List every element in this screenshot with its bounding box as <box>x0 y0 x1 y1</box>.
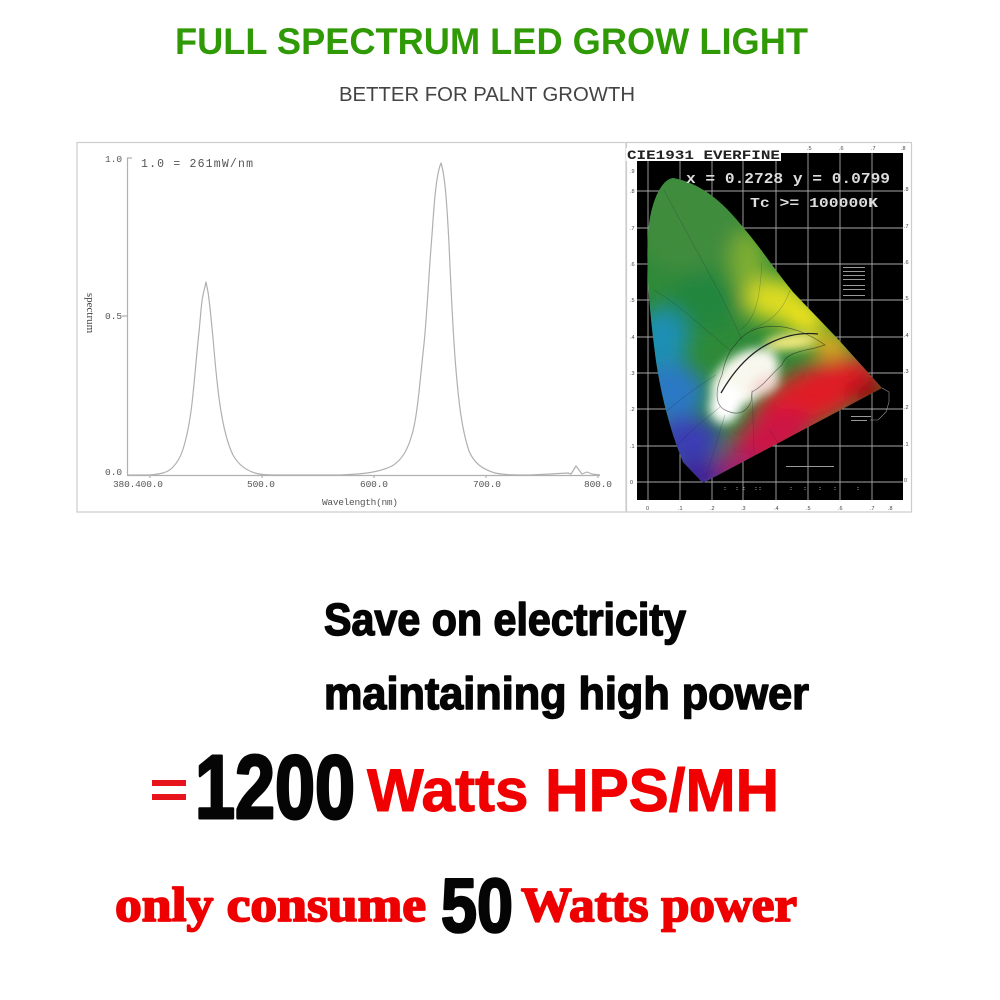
panel: spectrum chart <box>77 142 626 512</box>
axis labels: 0.5 <box>105 311 122 322</box>
equals sign <box>152 780 186 800</box>
axis labels: Wavelength(nm) <box>322 497 398 508</box>
diagram tick labels: .4 <box>630 335 635 341</box>
diagram tick labels: .7 <box>904 224 909 230</box>
axis labels: 800.0 <box>584 479 612 490</box>
diagram tick labels: .5 <box>806 506 811 512</box>
diagram tick labels: .7 <box>870 506 875 512</box>
diagram tick labels: 0 <box>646 506 649 512</box>
diagram tick labels: 0 <box>904 478 907 484</box>
equivalence line: 1200 watts HPS/MH <box>152 738 779 838</box>
number 1200: 1200 <box>195 738 355 838</box>
diagram tick labels: .6 <box>838 506 843 512</box>
diagram tick labels: .3 <box>741 506 746 512</box>
benefit text: save on electricity: Save on electricity <box>324 594 686 645</box>
axis labels: 600.0 <box>360 479 388 490</box>
colour temperature readout: Tc >= 100000K <box>750 197 879 212</box>
diagram tick labels: .1 <box>678 506 683 512</box>
watts HPS/MH label: Watts HPS/MH <box>367 757 779 824</box>
diagram tick labels <box>630 146 909 512</box>
axis labels: 1.0 <box>105 154 122 165</box>
diagram tick labels: .7 <box>630 226 635 232</box>
diagram tick labels: .2 <box>630 407 635 413</box>
axis labels: 380.400.0 <box>113 479 163 490</box>
number 50: 50 <box>441 864 513 949</box>
planckian locus <box>721 333 818 393</box>
grid <box>637 153 903 500</box>
watts power label: Watts power <box>521 877 797 932</box>
diagram tick labels: .5 <box>807 146 812 152</box>
diagram tick labels: .8 <box>901 146 906 152</box>
diagram tick labels: .1 <box>630 444 635 450</box>
title: FULL SPECTRUM LED GROW LIGHT <box>175 21 808 62</box>
diagram tick labels: .5 <box>904 296 909 302</box>
benefit text: maintaining high power: maintaining high power <box>324 668 809 719</box>
y-axis title: spectrum <box>84 293 96 334</box>
consumption line: only consume 50 watts power <box>115 864 797 949</box>
colour horseshoe <box>647 178 882 483</box>
small diagram annotations <box>725 267 889 490</box>
diagram tick labels: .4 <box>904 333 909 339</box>
diagram tick labels: .3 <box>904 369 909 375</box>
panel: CIE1931 chromaticity diagram: CIE1931 EVERFINE <box>627 149 780 163</box>
chromaticity readout: x = 0.2728 y = 0.0799 <box>686 171 890 188</box>
diagram tick labels: .4 <box>774 506 779 512</box>
diagram tick labels: 0 <box>630 480 633 486</box>
diagram tick labels: .8 <box>888 506 893 512</box>
diagram tick labels: .6 <box>904 260 909 266</box>
subtitle: BETTER FOR PALNT GROWTH <box>339 84 635 106</box>
diagram tick labels: .3 <box>630 371 635 377</box>
diagram tick labels: .6 <box>630 262 635 268</box>
diagram tick labels: .5 <box>630 298 635 304</box>
diagram tick labels: .2 <box>904 405 909 411</box>
diagram tick labels: .6 <box>839 146 844 152</box>
axis labels: 500.0 <box>247 479 275 490</box>
region boundaries <box>654 190 790 478</box>
diagram tick labels: .8 <box>904 187 909 193</box>
diagram tick labels: .8 <box>630 189 635 195</box>
axis labels: 0.0 <box>105 467 122 478</box>
panel: CIE1931 chromaticity diagram <box>626 142 912 512</box>
axis labels: 700.0 <box>473 479 501 490</box>
axis labels <box>105 154 612 508</box>
chart axes <box>122 158 600 478</box>
spectrum curve <box>127 163 600 475</box>
diagram tick labels: .1 <box>904 442 909 448</box>
diagram tick labels: .9 <box>630 169 635 175</box>
only consume label: only consume <box>115 877 426 932</box>
diagram tick labels: .2 <box>710 506 715 512</box>
diagram tick labels: .7 <box>871 146 876 152</box>
scale note: 1.0 = 261mW/nm <box>141 158 253 171</box>
diagram header <box>626 148 781 161</box>
